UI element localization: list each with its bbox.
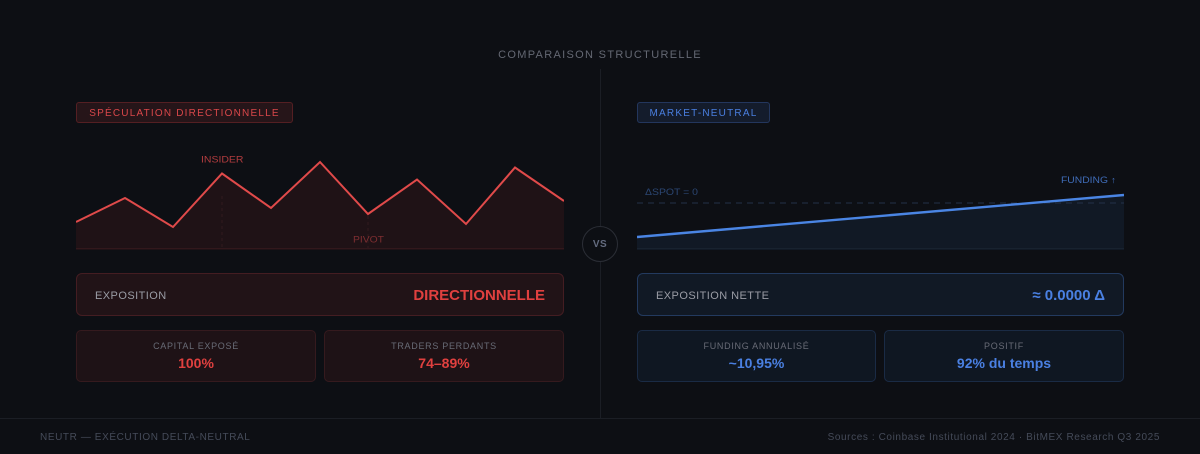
row: exposition <box>76 273 564 316</box>
badge: market-neutral: MARKET-NEUTRAL <box>650 108 757 119</box>
stat: traders perdants: TRADERS PERDANTS <box>391 341 497 351</box>
badge: market-neutral <box>637 102 770 123</box>
stat: positif <box>884 330 1124 382</box>
stat: positif: POSITIF <box>984 341 1024 351</box>
badge: speculation <box>76 102 293 123</box>
stat: capital expose: 100% <box>178 355 214 371</box>
stat: funding annualise: ~10,95% <box>729 355 784 371</box>
chart: directional price line <box>76 154 564 250</box>
stat: funding annualise: FUNDING ANNUALISÉ <box>704 341 809 351</box>
label: delta spot: ΔSPOT = 0 <box>645 187 698 197</box>
VS badge: VS <box>593 239 607 250</box>
label: funding: FUNDING ↑ <box>1061 175 1116 185</box>
stat: funding annualise <box>637 330 876 382</box>
chart: funding line <box>637 175 1124 250</box>
stat: positif: 92% du temps <box>957 355 1051 371</box>
title: COMPARAISON STRUCTURELLE <box>498 49 702 61</box>
row: exposition nette: EXPOSITION NETTE <box>656 290 769 302</box>
footer left: NEUTR — EXÉCUTION DELTA-NEUTRAL <box>40 432 250 443</box>
stat: capital expose: CAPITAL EXPOSÉ <box>153 341 239 351</box>
stat: traders perdants: 74–89% <box>418 355 470 371</box>
row: exposition nette <box>637 273 1124 316</box>
row: exposition: DIRECTIONNELLE <box>413 287 545 304</box>
footer <box>0 418 1200 454</box>
label: pivot: PIVOT <box>353 234 385 244</box>
stat: capital expose <box>76 330 316 382</box>
row: exposition: EXPOSITION <box>95 290 167 302</box>
label: insider: INSIDER <box>201 154 244 164</box>
footer right: Sources : Coinbase Institutional 2024 · BitMEX Research Q3 2025 <box>828 432 1160 443</box>
stat: traders perdants <box>324 330 564 382</box>
row: exposition nette: ≈ 0.0000 Δ <box>1032 287 1105 304</box>
VS badge <box>582 226 618 262</box>
panel: speculation directionnelle <box>76 102 564 382</box>
badge: speculation: SPÉCULATION DIRECTIONNELLE <box>89 108 280 119</box>
